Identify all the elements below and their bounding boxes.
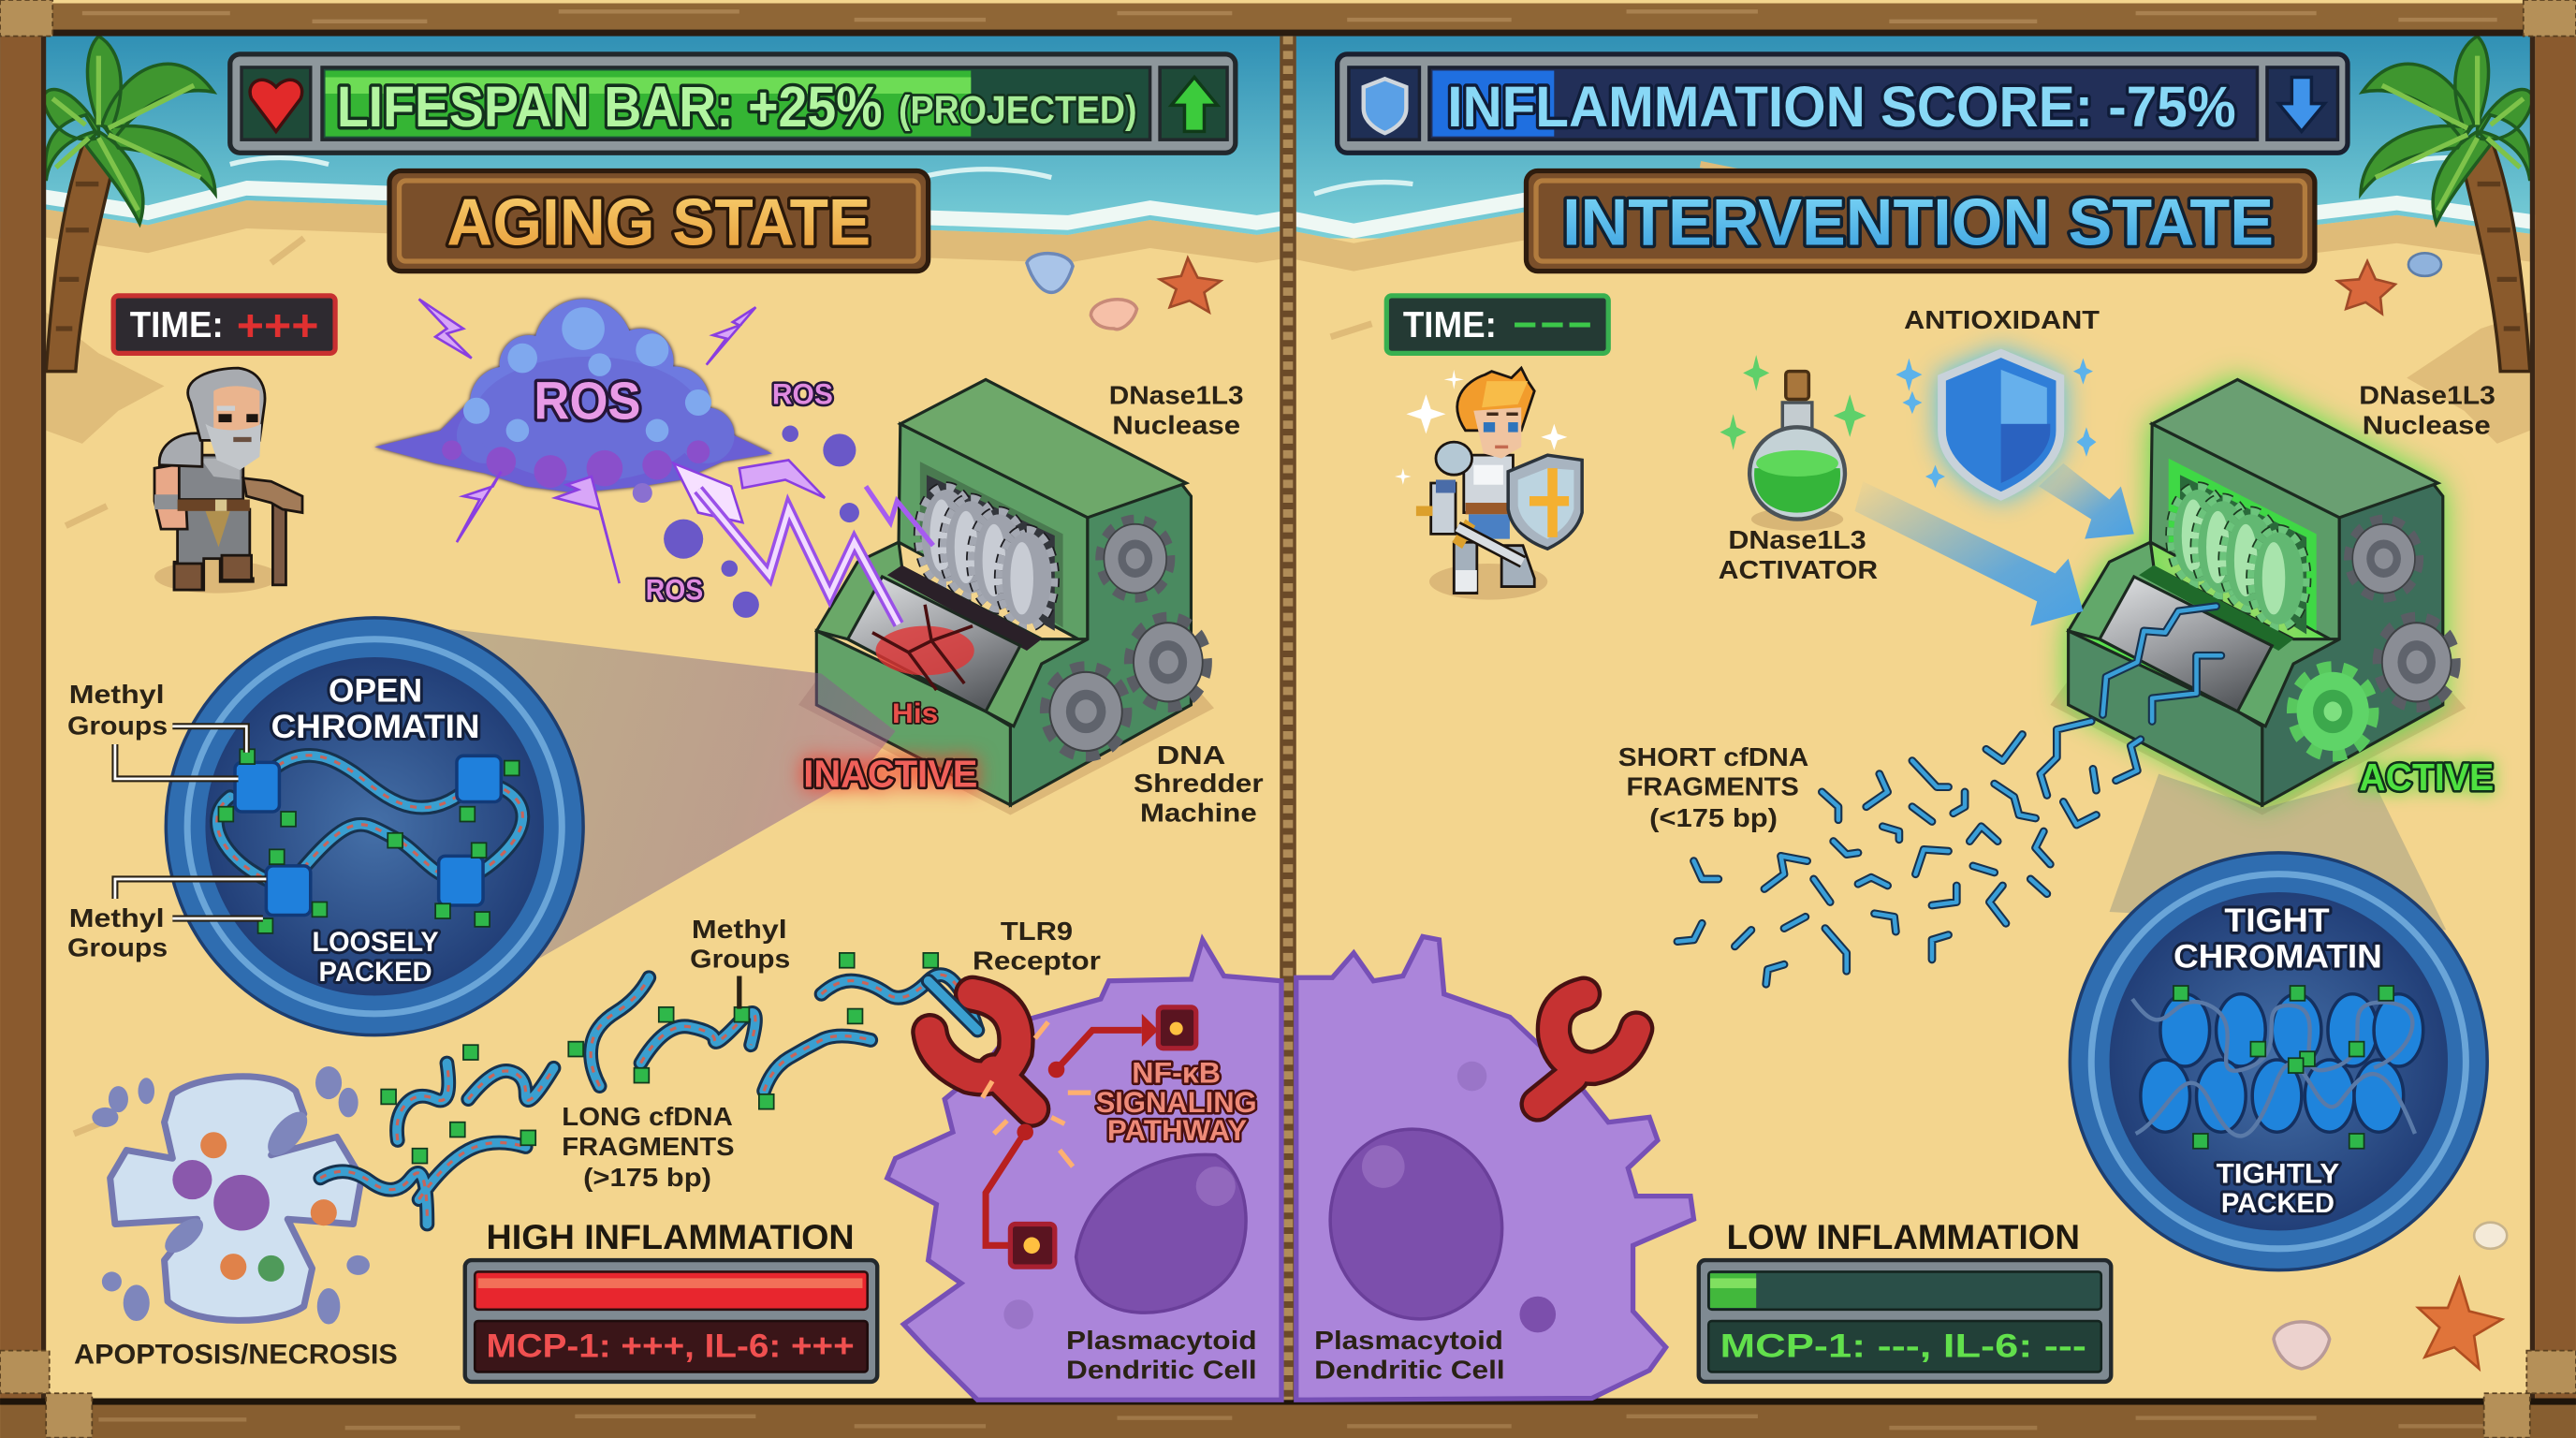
tight chromatin circle: PACKED — [2221, 1188, 2334, 1219]
long cfDNA fragments: Receptor — [973, 946, 1101, 975]
shield: antioxidant: ANTIOXIDANT — [1904, 305, 2100, 334]
shredder opening with grey teeth — [920, 462, 1063, 631]
icon: up arrow — [1171, 77, 1218, 131]
wrapped DNA — [2132, 999, 2415, 1136]
shield: antioxidant — [1895, 305, 2100, 496]
long cfDNA fragments — [320, 915, 1101, 1224]
activator label: DNase1L3 — [1728, 525, 1866, 554]
tight chromatin circle: TIGHTLY — [2217, 1159, 2339, 1190]
NF-kB label: NF-κB — [1132, 1056, 1221, 1090]
high inflammation panel: MCP-1: +++, IL-6: +++ — [487, 1328, 855, 1365]
methyl groups — [218, 749, 520, 933]
decorative shells: top left — [1027, 254, 1221, 330]
low inflammation panel: MCP-1: ---, IL-6: --- — [1720, 1328, 2086, 1365]
time badge: intervention: --- — [1512, 300, 1593, 344]
cell label: Plasmacytoid — [1314, 1326, 1503, 1355]
inflammation text: INFLAMMATION SCORE: -75% — [1447, 75, 2236, 139]
machine labels: intervention: DNase1L3 — [2359, 381, 2496, 410]
active green gear — [2295, 670, 2371, 753]
machine labels: aging: Shredder — [1134, 769, 1264, 798]
heading: intervention state: INTERVENTION STATE — [1562, 184, 2274, 258]
arrow: antioxidant to machine — [2039, 463, 2134, 539]
DNA strand — [217, 756, 522, 888]
methyl group callouts: Groups — [67, 932, 168, 961]
methyl group callouts — [67, 680, 266, 961]
machine labels: aging: Nuclease — [1112, 410, 1240, 439]
dendritic cell: aging: PATHWAY — [1107, 1113, 1247, 1147]
inflammation score bar — [1338, 54, 2348, 153]
zoom wedge: intervention — [2110, 774, 2446, 930]
dendritic cell: intervention: Dendritic Cell — [1314, 1355, 1505, 1384]
machine labels: intervention: Nuclease — [2363, 410, 2491, 439]
status: inactive: INACTIVE — [803, 753, 977, 796]
side panel — [1010, 481, 1191, 805]
label: methyl groups: Methyl — [692, 915, 787, 944]
machine labels: aging — [892, 381, 1264, 828]
short cfDNA fragments: (<175 bp) — [1649, 803, 1778, 832]
potion: DNase1L3 activator: ACTIVATOR — [1719, 555, 1878, 584]
icon: heart — [250, 80, 302, 131]
ROS orbs and labels: ROS — [772, 377, 833, 411]
dendritic cell: aging: SIGNALING — [1096, 1085, 1257, 1119]
long cfDNA fragments: (>175 bp) — [583, 1163, 711, 1192]
time badge: aging — [113, 296, 335, 353]
heading: intervention state — [1526, 171, 2315, 271]
machine labels: aging: His — [892, 698, 938, 729]
circle titles: OPEN — [329, 672, 422, 709]
machine ground shadow: intervention — [2050, 674, 2466, 814]
time badge: intervention — [1386, 296, 1608, 353]
machine labels: intervention — [2359, 381, 2496, 439]
tight chromatin circle: CHROMATIN — [2174, 939, 2382, 976]
heading: aging state: AGING STATE — [446, 184, 871, 258]
open chromatin circle: LOOSELY — [313, 927, 439, 958]
ROS orbs and labels: ROS — [646, 573, 703, 607]
ROS orbs and labels — [633, 377, 859, 618]
ROS cloud label: ROS — [534, 372, 641, 431]
time badge: aging: +++ — [237, 301, 319, 350]
high inflammation panel — [465, 1218, 877, 1382]
machine labels: aging: Machine — [1140, 799, 1257, 828]
decorative shells: bottom right — [2274, 1223, 2507, 1369]
label: TLR9: TLR9 — [1001, 917, 1073, 946]
TLR9 receptor — [1538, 994, 1636, 1104]
lightning bolts — [419, 299, 933, 624]
upper front face — [899, 424, 1088, 644]
lifespan bar — [230, 54, 1236, 153]
dendritic cell: aging: Dendritic Cell — [1066, 1355, 1257, 1384]
icon: down arrow — [2278, 77, 2324, 131]
low inflammation panel — [1699, 1218, 2111, 1382]
dendritic cell: intervention — [1296, 936, 1693, 1400]
machine labels: aging: DNase1L3 — [1109, 381, 1244, 410]
palm tree left — [43, 37, 215, 372]
packed histones — [2141, 994, 2423, 1132]
methyl groups — [2174, 986, 2393, 1149]
palm tree right — [2361, 37, 2533, 372]
NF-kB signaling arrows — [983, 1007, 1196, 1267]
open chromatin circle: CHROMATIN — [271, 709, 480, 745]
status: active: ACTIVE — [2359, 756, 2494, 799]
tight chromatin circle — [2070, 853, 2487, 1270]
long cfDNA fragments: FRAGMENTS — [562, 1132, 735, 1161]
low inflammation panel: LOW INFLAMMATION — [1727, 1218, 2080, 1256]
histone cubes — [235, 756, 501, 916]
icon: shield — [1364, 79, 1406, 133]
methyl group callouts: Methyl — [69, 680, 165, 709]
label: apoptosis: APOPTOSIS/NECROSIS — [74, 1340, 398, 1371]
projected note: (PROJECTED) — [899, 88, 1137, 132]
DNA shredder machine: aging — [816, 379, 1205, 805]
cell label: Plasmacytoid — [1066, 1326, 1257, 1355]
label: short fragments: SHORT cfDNA — [1618, 742, 1808, 771]
open chromatin circle — [166, 618, 583, 1035]
zoom wedge: aging — [411, 624, 896, 966]
dendritic cell: aging — [887, 940, 1281, 1400]
machine labels: aging: DNA — [1157, 741, 1225, 770]
gears — [1048, 522, 1205, 753]
old man character — [154, 368, 302, 594]
rope divider — [1280, 37, 1296, 1400]
gears — [2351, 522, 2452, 704]
label: long fragments: LONG cfDNA — [562, 1102, 733, 1131]
ROS cloud — [374, 299, 772, 493]
long cfDNA fragments: Groups — [690, 945, 790, 974]
lower housing — [816, 542, 1088, 726]
open chromatin circle: PACKED — [319, 957, 432, 988]
high inflammation panel: HIGH INFLAMMATION — [487, 1218, 855, 1256]
machine ground shadow: aging — [798, 674, 1214, 814]
shredder opening with green teeth — [2169, 459, 2317, 634]
arrow: activator to machine — [1854, 481, 2083, 626]
short cfDNA fragments — [1618, 607, 2221, 984]
short cfDNA fragments: FRAGMENTS — [1627, 771, 1799, 800]
methyl group callouts: Methyl — [69, 903, 165, 932]
damaged roller with red crack — [848, 565, 1042, 712]
heading: aging state — [389, 171, 929, 271]
machine shell with green glow — [2069, 379, 2443, 805]
decorative shells: top right — [2337, 253, 2441, 314]
time badge: intervention: TIME: — [1403, 305, 1497, 345]
potion: DNase1L3 activator — [1719, 355, 1878, 584]
roof — [900, 379, 1186, 518]
circle titles: TIGHT — [2224, 902, 2330, 939]
time badge: aging: TIME: — [130, 305, 224, 345]
DNA shredder machine: intervention — [2069, 379, 2452, 805]
lifespan text: LIFESPAN BAR: +25% — [337, 75, 883, 139]
hero knight character — [1395, 368, 1582, 600]
roller — [2100, 565, 2293, 712]
apoptotic cell — [74, 1066, 398, 1371]
methyl group callouts: Groups — [67, 711, 168, 740]
TLR9 receptor — [929, 994, 1032, 1109]
